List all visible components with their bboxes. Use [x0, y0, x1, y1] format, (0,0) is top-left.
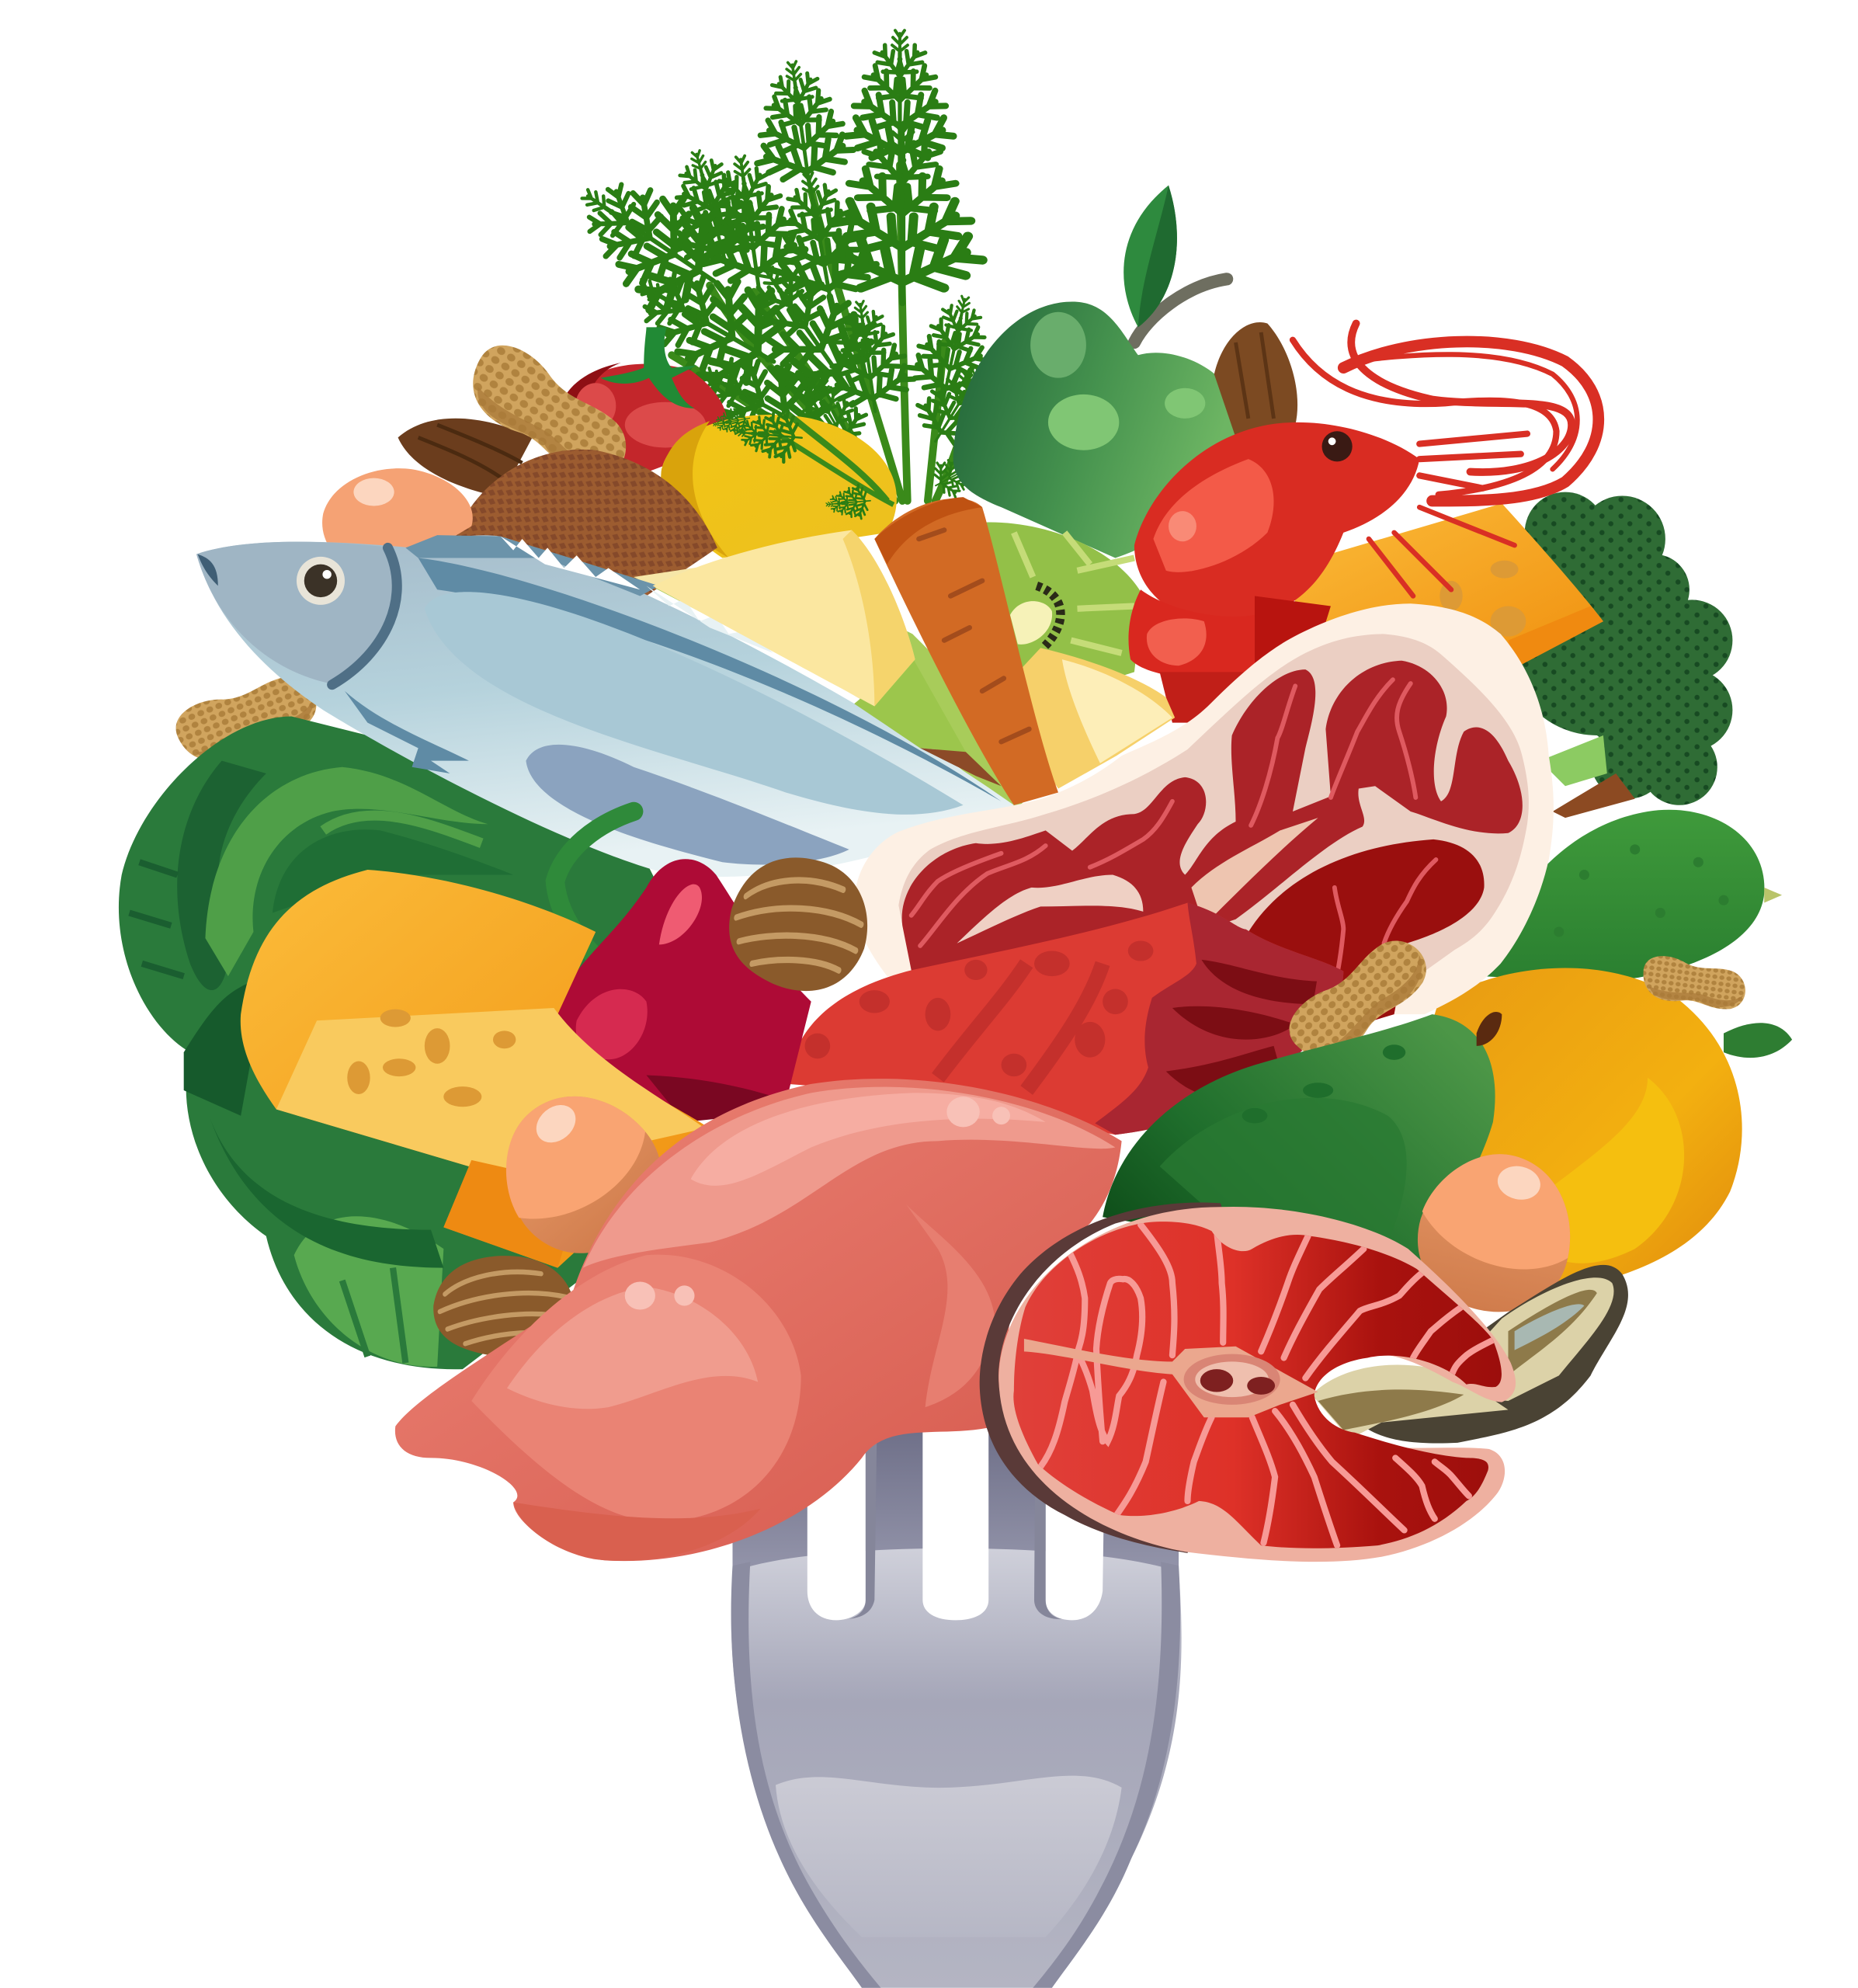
cucumber [1483, 810, 1782, 982]
fish [196, 535, 1014, 877]
lettuce [119, 717, 672, 1369]
red bell pepper [554, 812, 811, 1122]
cheese wedge left [241, 870, 710, 1268]
carrot greens over lemon [710, 403, 894, 523]
potato chunk [653, 530, 915, 706]
carrot [874, 497, 1058, 805]
peanut top [456, 334, 644, 492]
apple leaf and stem [1123, 186, 1227, 342]
walnut [717, 845, 880, 1003]
carrot greens [550, 30, 1013, 505]
salmon steak [980, 1203, 1516, 1562]
mango [1419, 968, 1792, 1293]
egg left [471, 1064, 689, 1282]
walnut lower [433, 1256, 575, 1357]
fork [731, 1420, 1182, 1988]
green apple [953, 302, 1241, 558]
red meat slice [788, 902, 1343, 1135]
almond behind shrimp [1214, 322, 1297, 437]
backing fin and kiwi flesh under fish edge [634, 558, 1052, 812]
cheese wedge right [1273, 503, 1603, 668]
lemon [661, 415, 897, 558]
peanut left [169, 662, 324, 772]
broccoli [1508, 492, 1732, 818]
egg behind fish [322, 468, 473, 558]
brown bread roll [453, 450, 717, 596]
peanut right [1640, 954, 1749, 1012]
shrimp [1128, 323, 1599, 723]
potato chunk lower [1005, 648, 1175, 789]
peanut centre [1279, 923, 1437, 1075]
avocado [1103, 1012, 1502, 1319]
kiwi [854, 523, 1143, 786]
raw chicken [395, 1079, 1122, 1561]
oyster [1311, 1265, 1628, 1444]
almond [398, 419, 533, 497]
egg right [1405, 1139, 1586, 1326]
steak [854, 603, 1554, 1052]
tomato [561, 327, 728, 482]
